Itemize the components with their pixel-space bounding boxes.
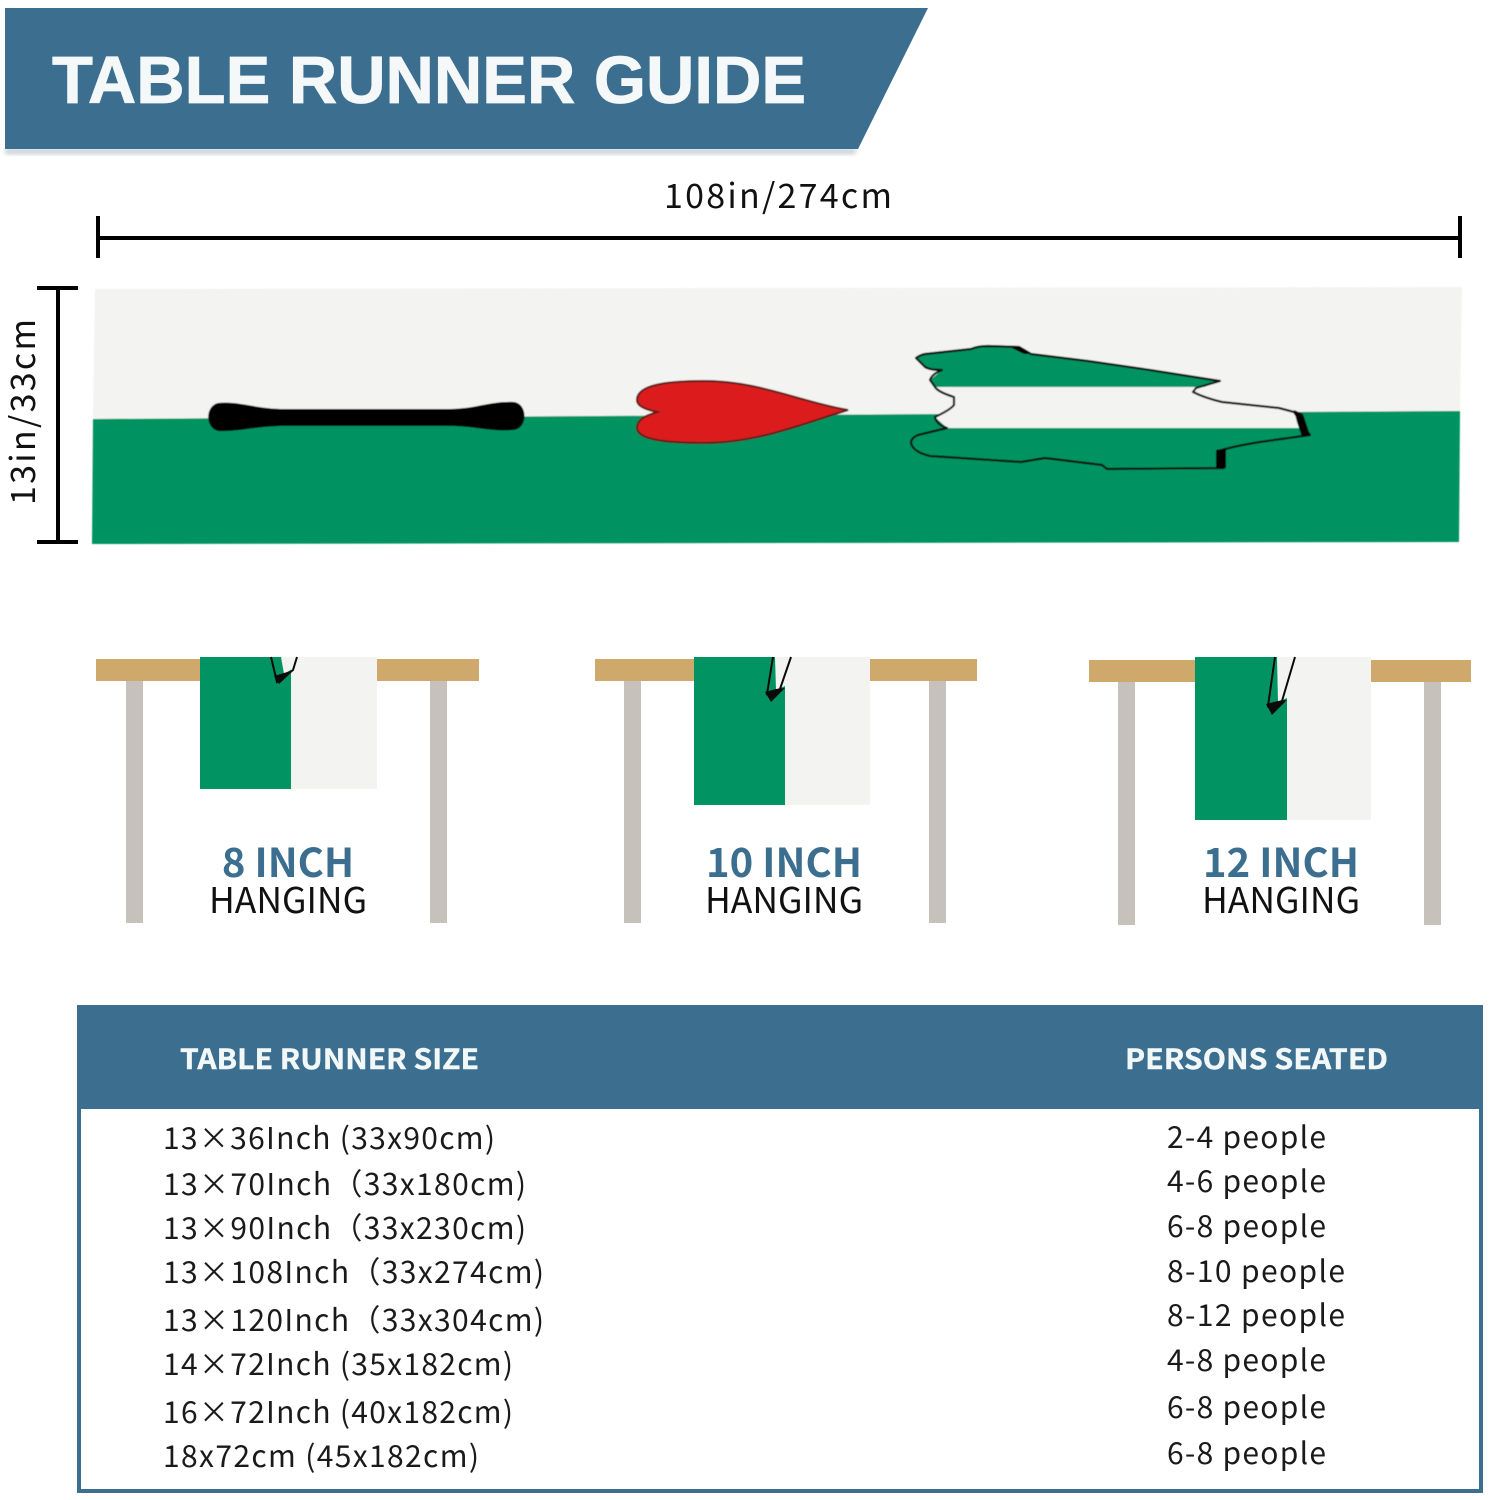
persons column: 2-4 people [1167, 1113, 1326, 1157]
size column [163, 1114, 544, 1476]
size column: 13×120Inch（33x304cm) [163, 1296, 544, 1340]
label [1202, 831, 1360, 924]
icon: black bar [208, 402, 524, 431]
persons column: 4-6 people [1167, 1157, 1326, 1201]
width dimension: 108in/274cm [664, 169, 892, 218]
table runner flag [92, 287, 1462, 544]
table header [77, 1005, 1483, 1109]
table: 8 inch hanging [96, 657, 479, 924]
label: 12 INCH [1203, 831, 1359, 889]
persons column: 6-8 people [1167, 1383, 1326, 1427]
table: 10 inch hanging [595, 657, 977, 924]
label [705, 831, 863, 924]
size column: 13×108Inch（33x274cm) [163, 1248, 544, 1292]
width dimension [97, 169, 1461, 258]
table: 12 inch hanging [1089, 657, 1471, 925]
persons column [1167, 1113, 1345, 1473]
size column: 13×36Inch (33x90cm) [163, 1114, 495, 1158]
label [209, 831, 367, 924]
size column: 13×90Inch（33x230cm) [163, 1204, 526, 1248]
title banner [5, 8, 928, 154]
size column: 13×70Inch（33x180cm) [163, 1160, 526, 1204]
persons column: 8-10 people [1167, 1247, 1345, 1291]
label: 8 INCH [222, 831, 354, 889]
icon: red heart [637, 381, 848, 443]
persons column: 6-8 people [1167, 1429, 1326, 1473]
size column: 14×72Inch (35x182cm) [163, 1340, 513, 1384]
icon: striped map [911, 346, 1310, 469]
label: 10 INCH [706, 831, 862, 889]
label: HANGING [1202, 873, 1360, 924]
table header: PERSONS SEATED [1125, 1038, 1388, 1078]
height dimension [0, 288, 78, 542]
label: HANGING [705, 873, 863, 924]
label: HANGING [209, 873, 367, 924]
persons column: 6-8 people [1167, 1202, 1326, 1246]
persons column: 8-12 people [1167, 1291, 1345, 1335]
size column: 18x72cm (45x182cm) [163, 1432, 479, 1476]
size column: 16×72Inch (40x182cm) [163, 1388, 513, 1432]
size table [77, 1005, 1483, 1491]
title banner: TABLE RUNNER GUIDE [52, 43, 806, 118]
persons column: 4-8 people [1167, 1336, 1326, 1380]
table header: TABLE RUNNER SIZE [180, 1038, 479, 1078]
